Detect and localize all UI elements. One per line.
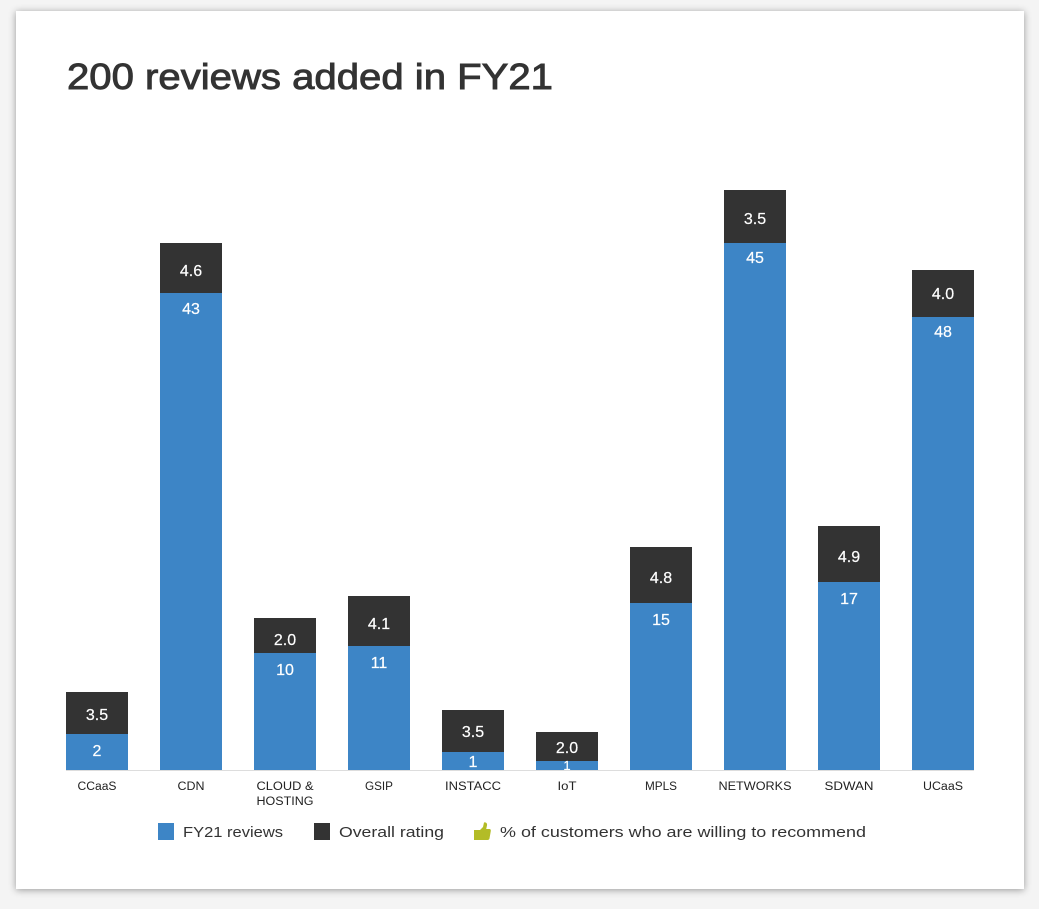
- bar: CCaaS: 3.5: [86, 707, 108, 724]
- bar: GSIP: 4.1: [368, 616, 390, 633]
- bar: UCaaS: 4.0: [932, 286, 954, 303]
- category axis labels: INSTACC: [445, 781, 501, 793]
- bar: INSTACC: 3.5: [462, 724, 484, 741]
- stacked bar chart: [66, 190, 974, 773]
- legend item: FY21 reviews: FY21 reviews: [183, 824, 283, 841]
- category axis labels: MPLS: [645, 781, 677, 793]
- bar: UCaaS: [912, 270, 974, 770]
- category axis labels: GSIP: [365, 781, 393, 793]
- bar: Cloud & Hosting: [254, 618, 316, 770]
- category axis labels: IoT: [558, 781, 576, 793]
- category axis labels: CLOUD &: [256, 781, 314, 793]
- icon: thumbs up: [474, 822, 491, 840]
- bar: Networks: 45: [746, 250, 764, 267]
- category axis labels: SDWAN: [824, 781, 874, 793]
- bar: Cloud & Hosting: 2.0: [274, 632, 296, 649]
- bar: IoT: [536, 732, 598, 773]
- bar: MPLS: 15: [652, 612, 670, 629]
- category axis labels: NETWORKS: [718, 781, 792, 793]
- legend item: Overall rating: [314, 823, 444, 841]
- category axis labels: CDN: [178, 781, 204, 793]
- bar: Networks: [724, 190, 786, 770]
- bar: GSIP: [348, 596, 410, 770]
- bar: IoT: 2.0: [556, 740, 578, 757]
- legend item: willingness to recommend: % of customers who are willing to recommend: [500, 824, 866, 841]
- bar: CDN: [160, 243, 222, 770]
- bar: CDN: 43: [182, 301, 200, 318]
- legend item: Overall rating: Overall rating: [339, 824, 444, 841]
- bar: UCaaS: 48: [934, 324, 952, 341]
- bar: CDN: 4.6: [180, 263, 202, 280]
- bar: GSIP: 11: [371, 655, 387, 672]
- bar: INSTACC: [442, 710, 504, 771]
- bar: CCaaS: [66, 692, 128, 770]
- bar: Cloud & Hosting: 10: [276, 662, 294, 679]
- bar: CCaaS: 2: [93, 743, 102, 760]
- category axis labels: [78, 781, 963, 808]
- category axis labels: UCaaS: [923, 781, 963, 793]
- bar: IoT: 1: [563, 758, 571, 773]
- category axis labels: CCaaS: [78, 781, 117, 793]
- bar: INSTACC: 1: [469, 754, 478, 771]
- title: 200 reviews added in FY21: [67, 56, 553, 97]
- legend: [158, 822, 866, 841]
- bar: MPLS: [630, 547, 692, 770]
- bar: SDWAN: [818, 526, 880, 770]
- bar: MPLS: 4.8: [650, 570, 672, 587]
- category axis labels: HOSTING: [256, 796, 314, 808]
- bar: SDWAN: 4.9: [838, 549, 860, 566]
- bar: Networks: 3.5: [744, 211, 766, 228]
- legend item: FY21 reviews: [158, 823, 283, 841]
- bar: SDWAN: 17: [840, 591, 858, 608]
